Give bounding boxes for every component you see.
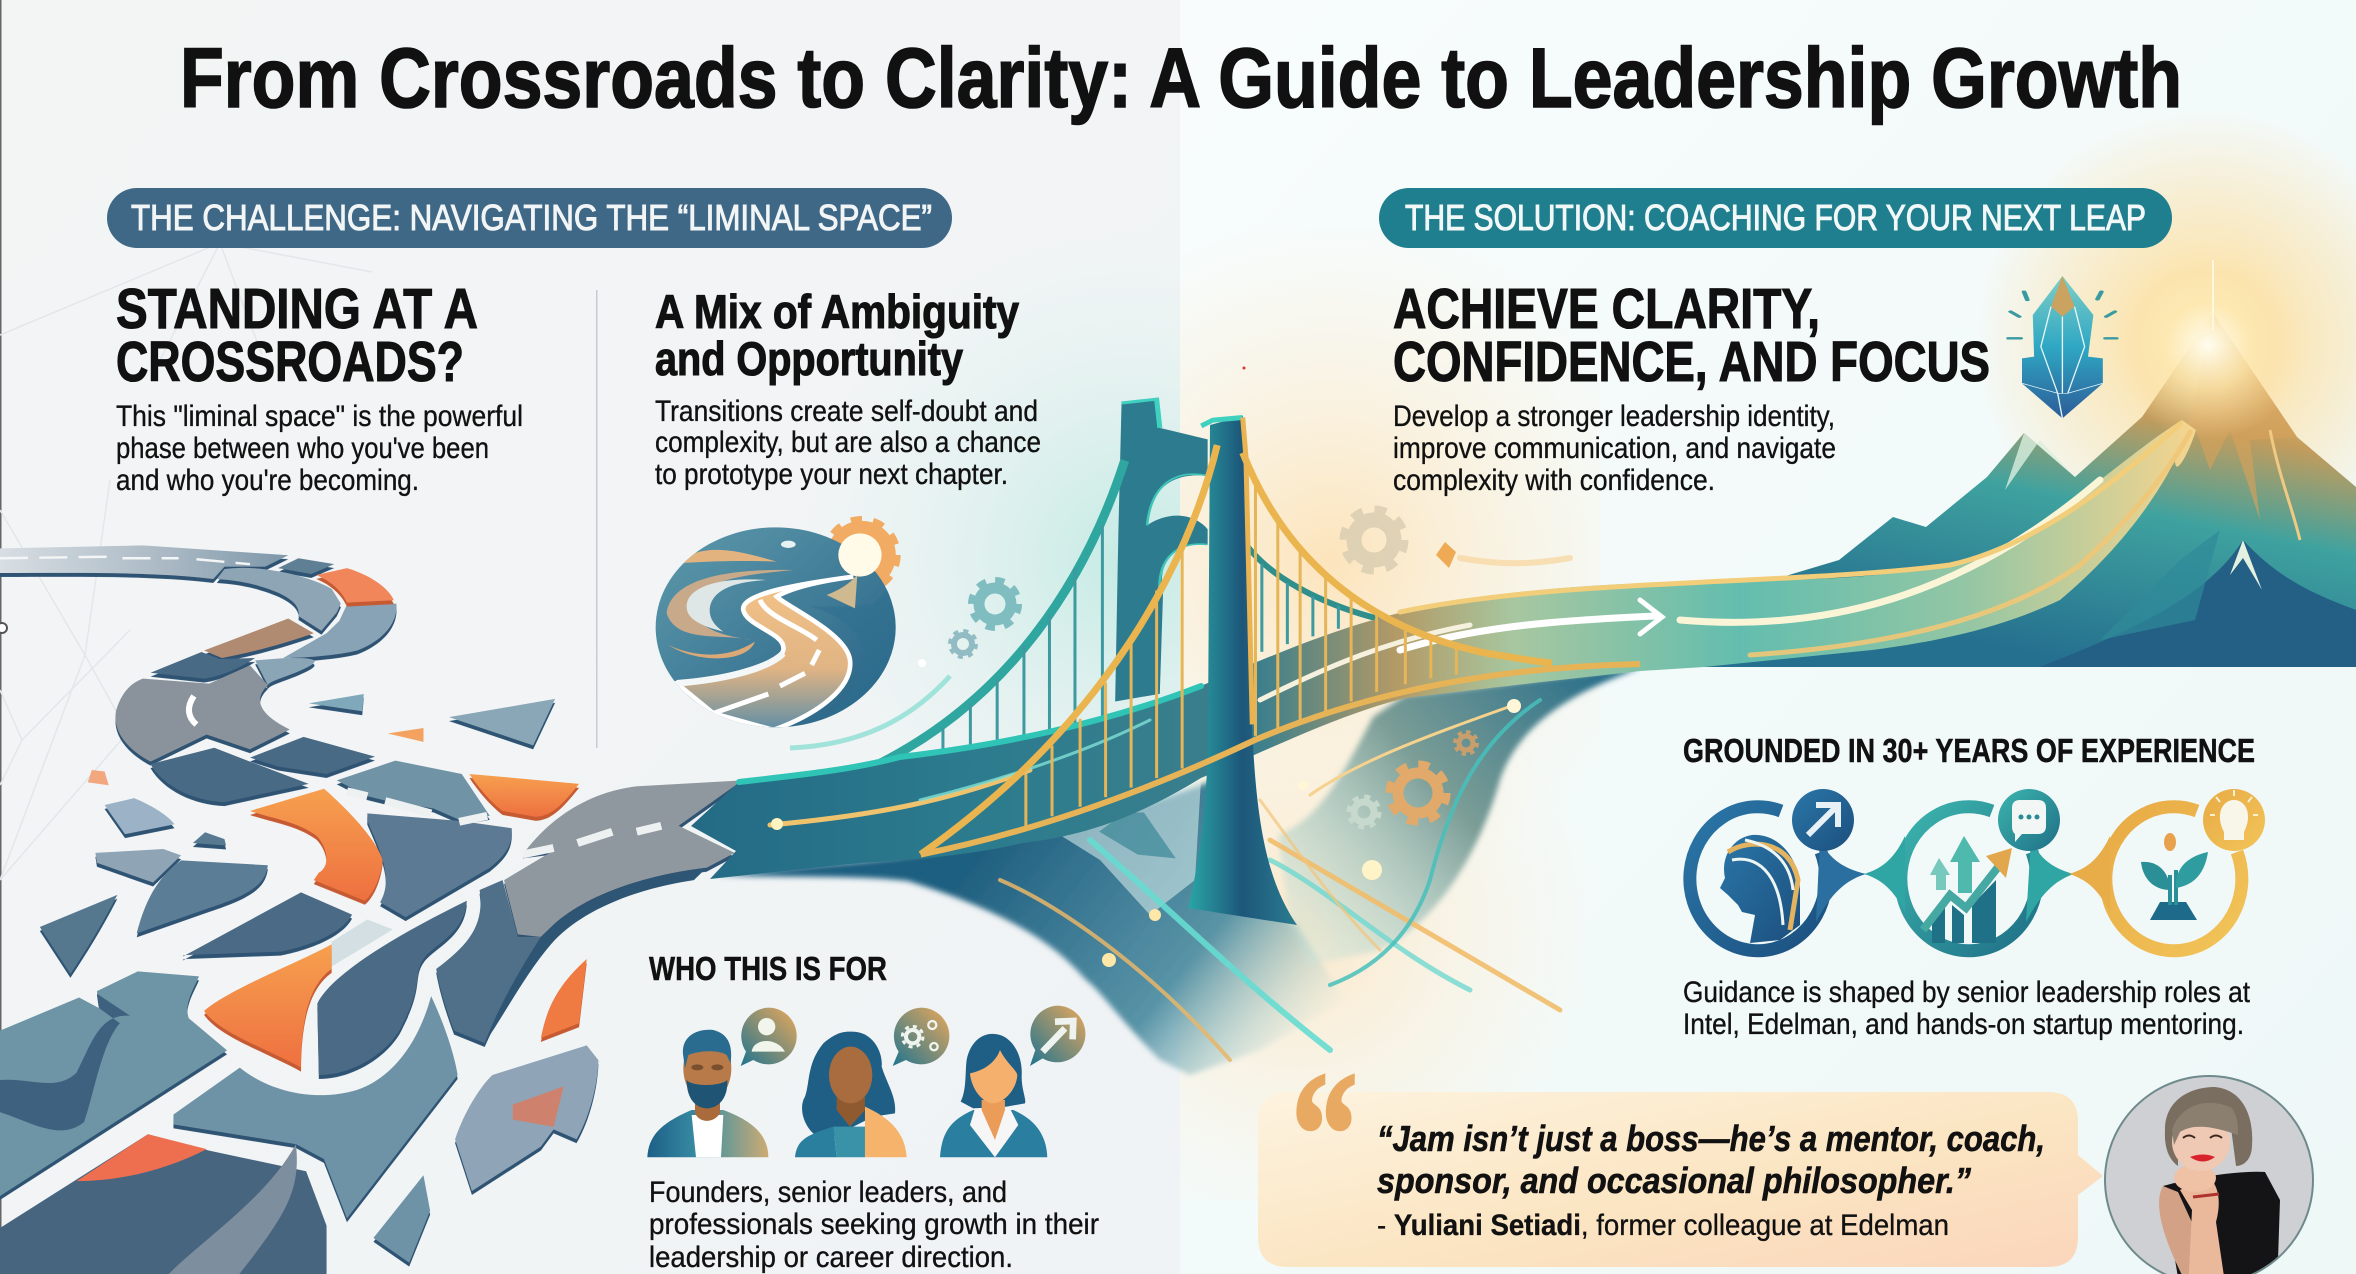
- icon: quotation mark: “: [1291, 1035, 1358, 1234]
- orange gear: [827, 520, 897, 590]
- panel: testimonial callout: [1258, 1035, 2103, 1267]
- icon: growth chart ring: [1864, 789, 2074, 951]
- icon: gears on lower ribbon: [1349, 732, 1477, 827]
- text block: standing at a crossroads: phase between who you've been: [116, 432, 489, 465]
- road detail: dark shading and lane marks: [0, 557, 707, 1274]
- text block: ambiguity and opportunity: complexity, but are also a chance: [655, 426, 1041, 459]
- text block: achieve clarity: [1393, 277, 1990, 497]
- text block: ambiguity and opportunity: Transitions create self-doubt and: [655, 395, 1038, 428]
- speech box: [1258, 1092, 2103, 1267]
- text block: achieve clarity: complexity with confidence.: [1393, 464, 1715, 497]
- text block: ambiguity and opportunity: and Opportunity: [655, 332, 963, 385]
- text block: achieve clarity: CONFIDENCE, AND FOCUS: [1393, 330, 1990, 394]
- description: leadership or career direction.: [649, 1241, 1013, 1274]
- person: woman in blue blazer: [940, 1034, 1047, 1157]
- road fragments: grey and slate pieces: [0, 545, 742, 1274]
- icons: three people with speech bubbles: [647, 1006, 1085, 1157]
- description: [649, 1176, 1099, 1274]
- text block: standing at a crossroads: STANDING AT A: [116, 277, 478, 341]
- speech bubble: gears: [893, 1008, 949, 1066]
- illustration: fractured road: [0, 545, 742, 1274]
- illustration: far bridge tower: [1099, 399, 1208, 858]
- illustration: bridge deck flowing into the summit ribbon: [691, 420, 2196, 879]
- gold cables and hangers: [921, 418, 1640, 855]
- illustration: near bridge tower and gold cables: [921, 416, 1640, 925]
- near tower: [1188, 416, 1297, 925]
- road fragments: orange pieces: [204, 568, 587, 1068]
- description: Intel, Edelman, and hands-on startup mentoring.: [1683, 1008, 2244, 1041]
- text block: achieve clarity: Develop a stronger leadership identity,: [1393, 400, 1835, 433]
- text block: ambiguity and opportunity: to prototype your next chapter.: [655, 458, 1008, 491]
- description: Founders, senior leaders, and: [649, 1176, 1007, 1209]
- quote text: [1377, 1118, 2045, 1242]
- description: [1683, 976, 2251, 1041]
- icon: teal gears: [790, 581, 1018, 748]
- icon: winding road sphere with gear: [653, 520, 900, 730]
- text block: achieve clarity: ACHIEVE CLARITY,: [1393, 277, 1820, 341]
- panel: the solution heading pill: THE SOLUTION: COACHING FOR YOUR NEXT LEAP: [1405, 197, 2146, 238]
- person: woman with long hair: [795, 1032, 907, 1157]
- quote text: “Jam isn’t just a boss—he’s a mentor, coach,: [1377, 1118, 2045, 1159]
- description: Guidance is shaped by senior leadership roles at: [1683, 976, 2251, 1009]
- text block: ambiguity and opportunity: A Mix of Ambiguity: [655, 285, 1019, 338]
- text block: standing at a crossroads: [116, 277, 523, 497]
- text block: ambiguity and opportunity: [655, 285, 1041, 491]
- icon: right pale gear and diamond: [1344, 510, 1570, 570]
- panel: who this is for: [647, 950, 1099, 1274]
- illustration: lower flowing streams under the bridge: [715, 668, 1640, 1075]
- icon: leader head ring: [1690, 789, 1866, 951]
- text block: standing at a crossroads: CROSSROADS?: [116, 330, 464, 394]
- text block: achieve clarity: improve communication, and navigate: [1393, 432, 1836, 465]
- illustration: mountain summit: [1704, 250, 2356, 667]
- speech bubble: arrow: [1030, 1006, 1085, 1066]
- divider between challenge columns: [596, 290, 598, 748]
- text block: standing at a crossroads: and who you're becoming.: [116, 464, 419, 497]
- description: professionals seeking growth in their: [649, 1208, 1099, 1241]
- road fragments: small orange accents: [77, 728, 564, 1181]
- speech bubble: mentor: [741, 1008, 797, 1066]
- person: bearded man: [647, 1030, 768, 1157]
- icon: plant and lightbulb ring: [2069, 789, 2265, 951]
- quote text: - Yuliani Setiadi, former colleague at Edelman: [1377, 1209, 1949, 1242]
- panel: the solution heading pill: [1379, 188, 2172, 248]
- icon: crystal: [2009, 276, 2116, 418]
- panel: the challenge heading pill: THE CHALLENGE: NAVIGATING THE “LIMINAL SPACE”: [131, 197, 932, 238]
- quote text: sponsor, and occasional philosopher.”: [1377, 1160, 1971, 1201]
- panel: the challenge heading pill: [107, 188, 952, 248]
- text block: standing at a crossroads: This "liminal space" is the powerful: [116, 400, 523, 433]
- panel: grounded in experience: [1683, 732, 2265, 1041]
- illustration: bridge cables behind deck: [870, 460, 1380, 768]
- photo: former colleague portrait: [2100, 1070, 2320, 1274]
- heading: WHO THIS IS FOR: [649, 950, 887, 987]
